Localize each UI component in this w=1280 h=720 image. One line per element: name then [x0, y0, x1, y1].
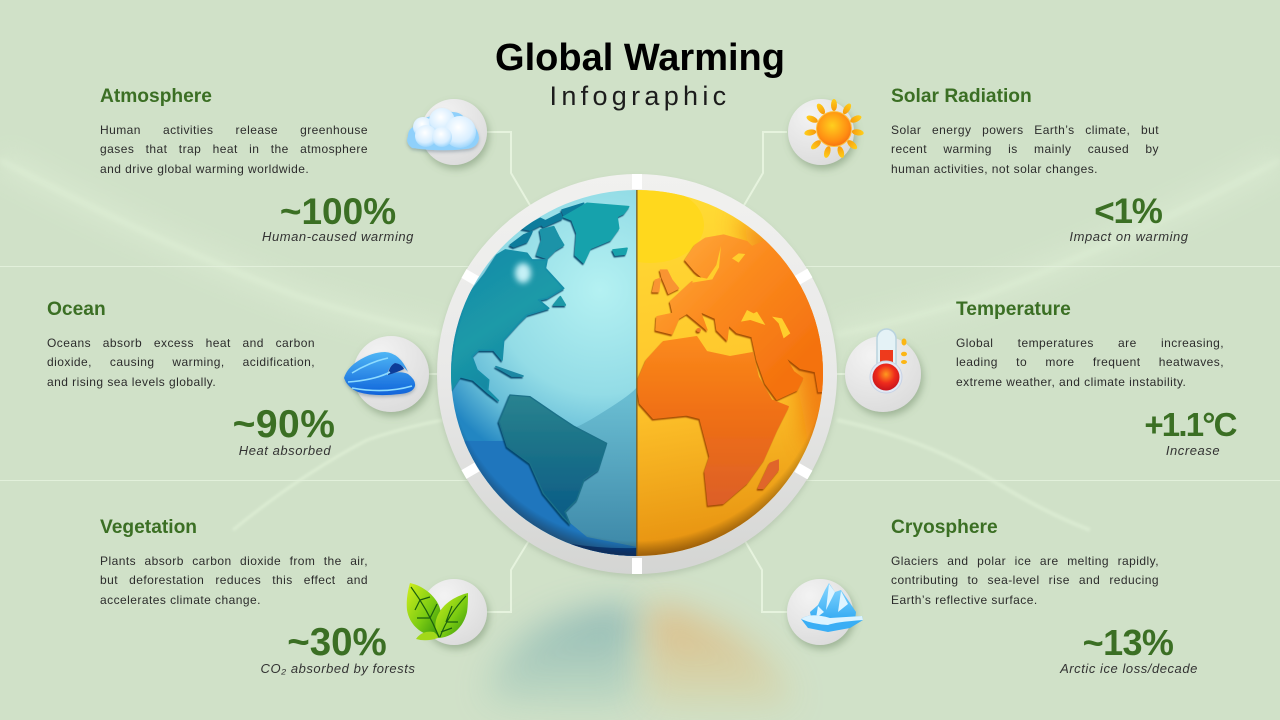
description: but deforestation reduces this effect and	[100, 573, 368, 587]
heading: Solar Radiation	[891, 86, 1032, 107]
heading: Atmosphere	[100, 86, 212, 107]
description: leading to more frequent heatwaves,	[956, 355, 1224, 369]
caption: Human-caused warming	[262, 229, 414, 244]
caption: CO₂ absorbed by forests	[261, 661, 415, 676]
title	[495, 37, 785, 111]
stat: ~90%	[233, 403, 335, 446]
globe	[451, 190, 823, 556]
description	[956, 336, 1224, 389]
description: dioxide, causing warming, acidification,	[47, 355, 315, 369]
connector lines	[429, 132, 845, 612]
icon: cloud	[407, 99, 487, 165]
icon: thermometer	[845, 329, 921, 412]
panel: solar radiation	[891, 86, 1189, 244]
orange rim glow	[728, 216, 823, 450]
description: contributing to sea-level rise and reducing	[891, 573, 1159, 587]
arctic glint	[515, 263, 531, 283]
description: Earth’s reflective surface.	[891, 593, 1038, 607]
description	[47, 336, 315, 389]
caption: Increase	[1166, 443, 1220, 458]
UK and Eurasia	[653, 235, 844, 399]
description	[891, 122, 1159, 176]
description: Global temperatures are increasing,	[956, 336, 1224, 350]
description	[100, 122, 368, 176]
heading: Temperature	[956, 299, 1071, 320]
description: Oceans absorb excess heat and carbon	[47, 336, 315, 350]
stat: ~30%	[287, 621, 387, 664]
North America and Greenland	[447, 203, 629, 401]
subtitle: Infographic	[550, 81, 730, 111]
description	[891, 554, 1159, 607]
icon: ocean wave	[344, 336, 429, 412]
panel: atmosphere	[100, 86, 414, 244]
caption: Heat absorbed	[239, 443, 331, 458]
caption: Impact on warming	[1069, 229, 1189, 244]
panel: vegetation	[100, 517, 415, 676]
description: Plants absorb carbon dioxide from the air,	[100, 554, 368, 568]
globe reflection	[485, 604, 795, 708]
hot hemisphere	[638, 190, 823, 556]
sphere shading	[458, 416, 818, 556]
description: extreme weather, and climate instability.	[956, 375, 1186, 389]
Africa and Madagascar	[637, 337, 788, 505]
globe ring	[437, 174, 837, 577]
description: Human activities release greenhouse	[100, 122, 368, 136]
panel: cryosphere	[891, 517, 1198, 676]
stat: <1%	[1094, 192, 1162, 231]
meridian	[636, 190, 638, 556]
description: recent warming is mainly caused by	[891, 142, 1159, 156]
inland seas	[692, 246, 790, 338]
stat: ~13%	[1083, 622, 1173, 663]
stat: +1.1°C	[1144, 406, 1236, 443]
South America	[499, 395, 607, 524]
description: Solar energy powers Earth’s climate, but	[891, 122, 1159, 136]
description: human activities, not solar changes.	[891, 162, 1098, 176]
background light streaks	[0, 160, 1280, 530]
description: accelerates climate change.	[100, 593, 261, 607]
description: gases that trap heat in the atmosphere	[100, 142, 368, 156]
description: and drive global warming worldwide.	[100, 162, 309, 176]
description: and rising sea levels globally.	[47, 375, 216, 389]
description	[100, 554, 368, 607]
panel: ocean	[47, 299, 335, 458]
icon: iceberg	[787, 579, 863, 645]
icon: leaves	[407, 579, 487, 645]
title line: Global Warming	[495, 37, 785, 79]
heading: Ocean	[47, 299, 106, 320]
heading: Vegetation	[100, 517, 197, 538]
description: Glaciers and polar ice are melting rapidly,	[891, 554, 1159, 568]
icon: sun	[788, 99, 864, 165]
panel: temperature	[956, 299, 1236, 458]
caption: Arctic ice loss/decade	[1060, 661, 1198, 676]
ocean hemisphere	[451, 190, 636, 556]
heading: Cryosphere	[891, 517, 998, 538]
stat: ~100%	[280, 191, 396, 232]
